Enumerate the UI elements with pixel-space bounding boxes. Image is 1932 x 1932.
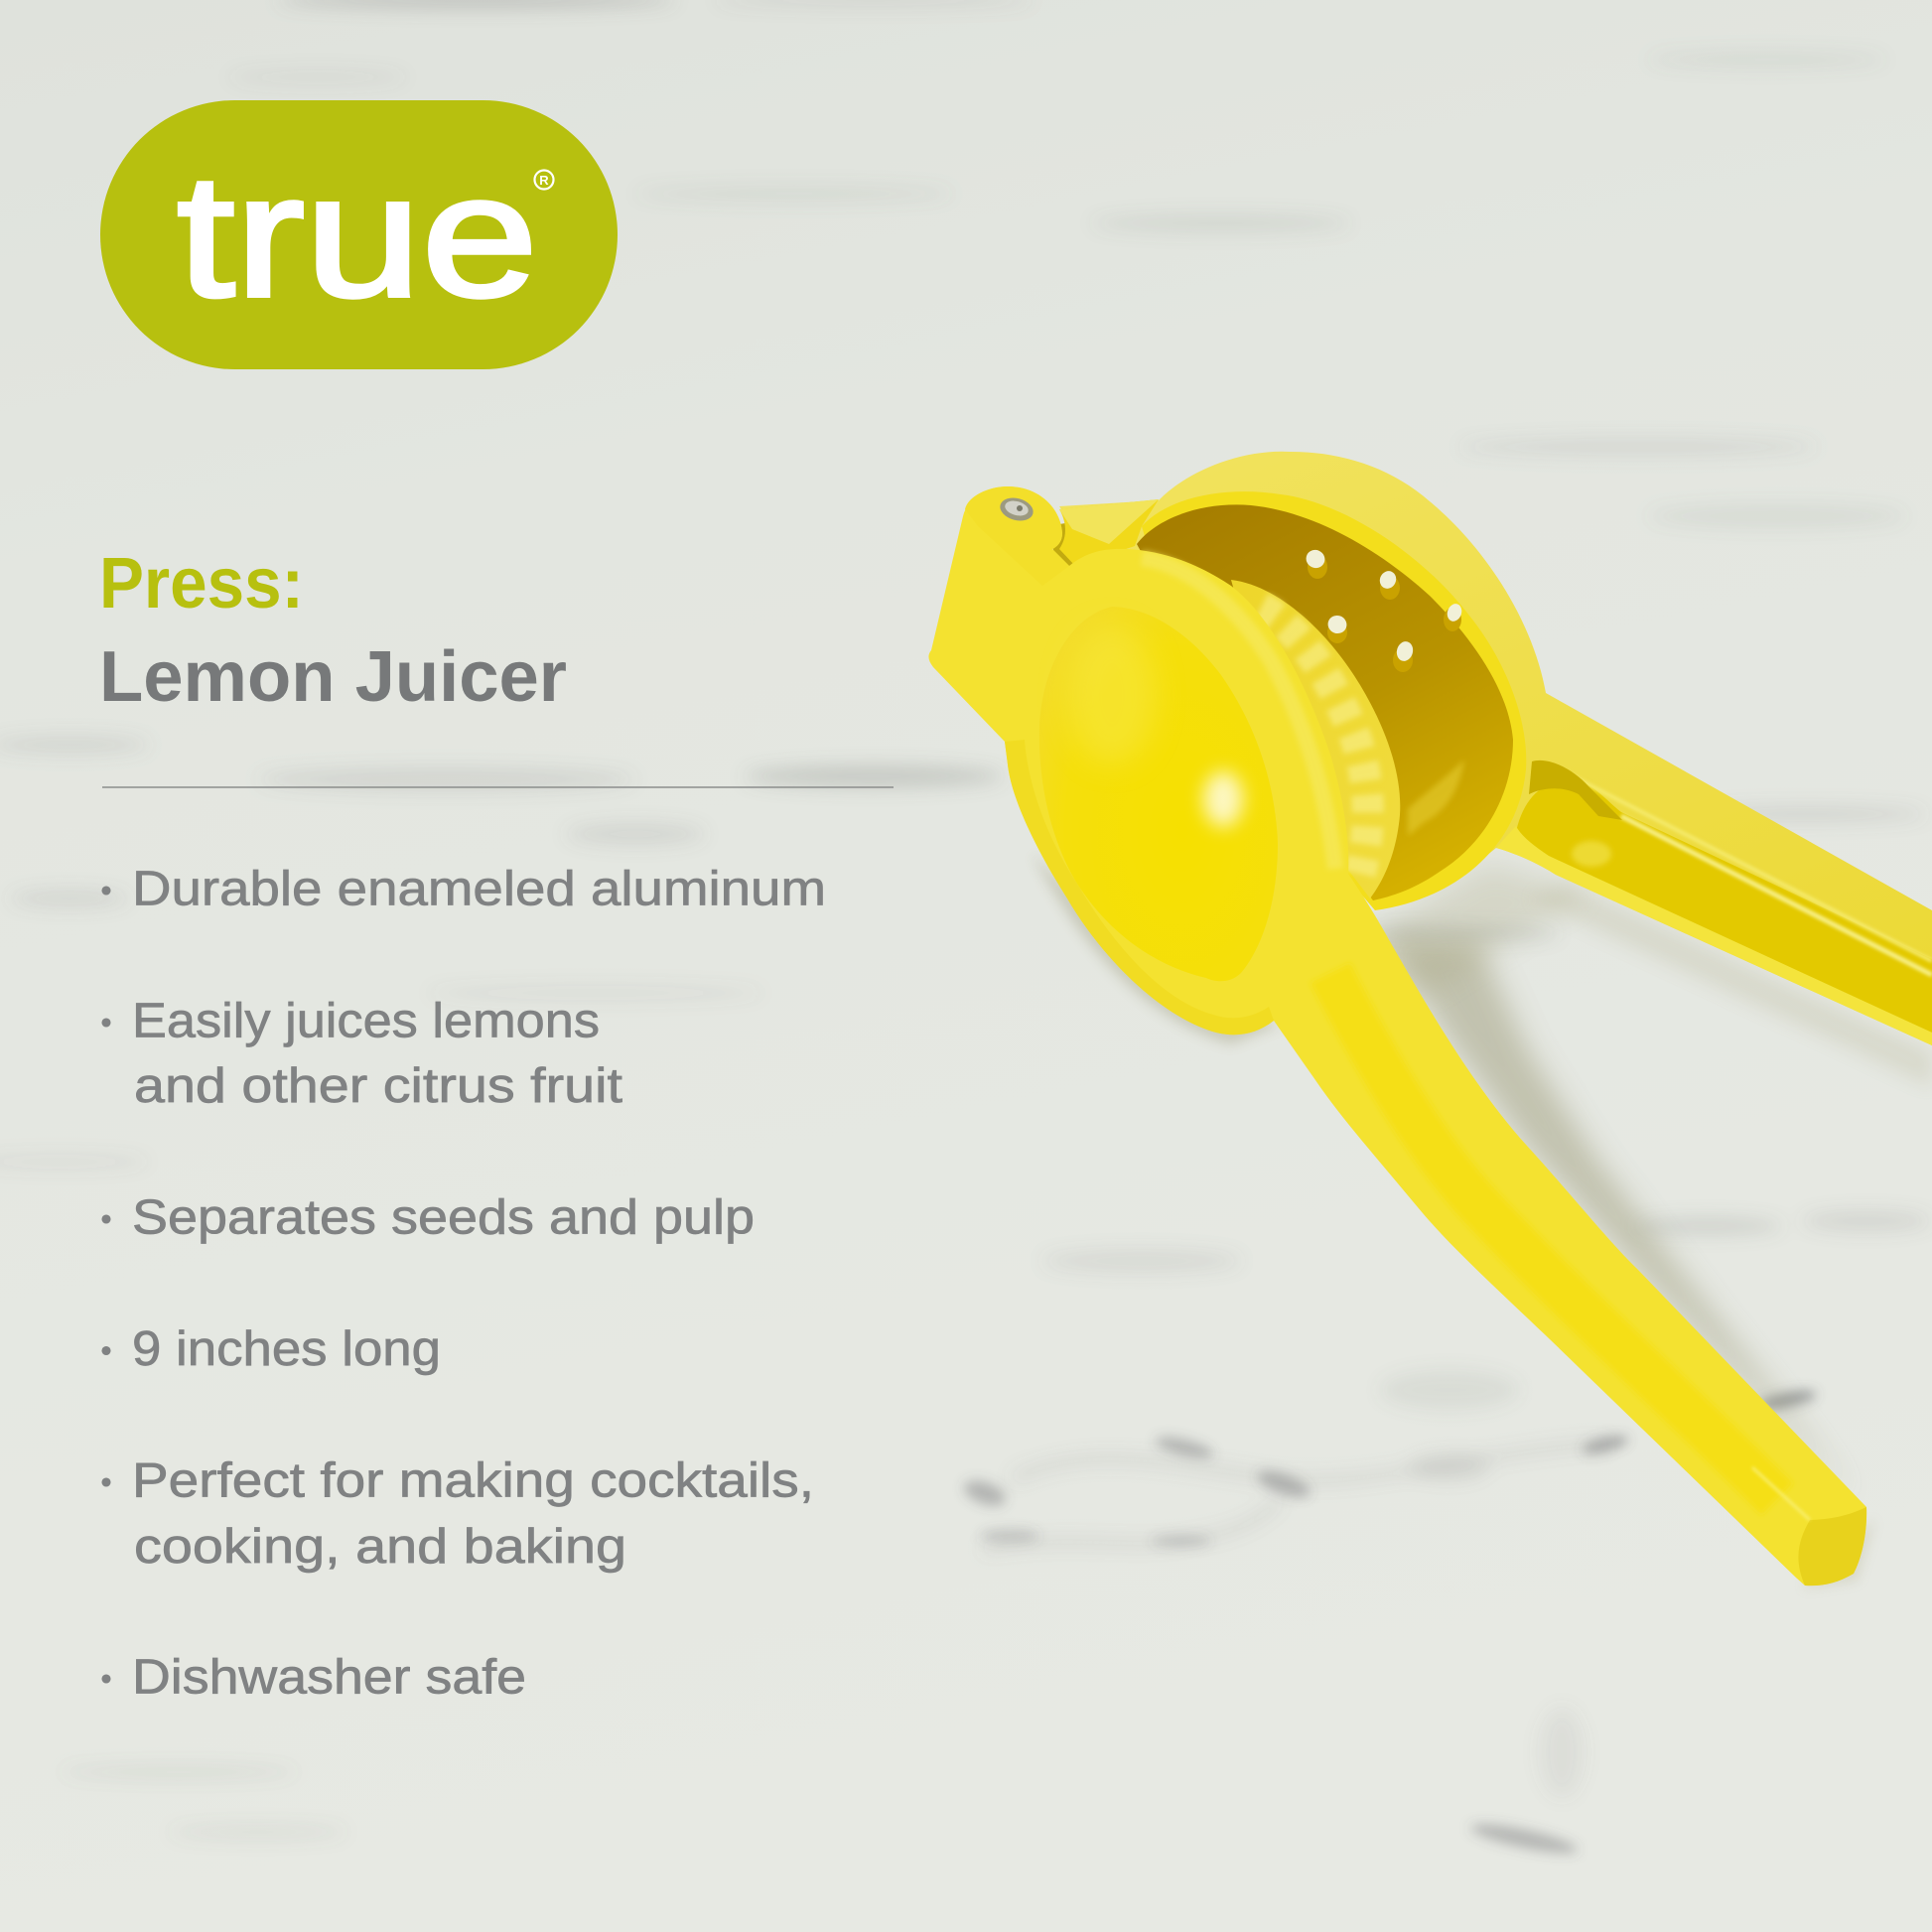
bullet: dishwasher: Dishwasher safe	[132, 1650, 526, 1704]
logo: true	[100, 100, 618, 369]
end cap highlight	[1752, 1467, 1810, 1520]
front cup outer body and handle	[928, 486, 1866, 1586]
logo wordmark: true	[177, 139, 538, 334]
heading: Lemon Juicer: Lemon Juicer	[99, 637, 567, 717]
bullet: uses	[102, 1453, 814, 1574]
hinge bracket	[1047, 499, 1159, 586]
heading	[99, 544, 567, 717]
ribbed reamer dome	[1231, 580, 1400, 898]
strainer holes	[1304, 547, 1464, 672]
lower lip	[1496, 826, 1932, 1045]
back cup dome	[1059, 452, 1932, 1045]
bullet: length: 9 inches long	[132, 1322, 441, 1376]
bullet: easily juices: and other citrus fruit	[134, 1059, 622, 1113]
handle ridge band	[1330, 973, 1777, 1499]
handle channel	[1516, 780, 1932, 1033]
rivet	[998, 494, 1035, 524]
bullet: durable: Durable enameled aluminum	[132, 862, 826, 915]
hinge recess	[1047, 521, 1092, 586]
cast shadows	[1033, 854, 1932, 1588]
bowl highlight	[1203, 771, 1243, 827]
strainer interior	[1137, 504, 1513, 900]
heading: Press: Press:	[99, 544, 304, 623]
registered mark	[534, 171, 554, 189]
handle end cap	[1798, 1507, 1866, 1586]
bullet: easily juices	[102, 995, 622, 1113]
logo pill	[100, 100, 618, 369]
handle highlights	[1621, 816, 1932, 975]
back cup rim	[1142, 491, 1526, 910]
rim highlight	[1142, 558, 1335, 869]
handle glint	[1572, 841, 1611, 867]
back handle body	[1496, 760, 1932, 1045]
joint recess	[1529, 760, 1622, 820]
bullet: easily juices: Easily juices lemons	[132, 995, 600, 1048]
bullet: separates: Separates seeds and pulp	[132, 1191, 755, 1245]
rim left shade	[1005, 740, 1274, 1035]
lemon juicer product	[928, 452, 1932, 1588]
reflection inside strainer	[1408, 759, 1464, 836]
inner bowl	[1039, 607, 1278, 981]
front press cup with long handle	[928, 486, 1866, 1586]
bullet: uses: Perfect for making cocktails,	[132, 1453, 814, 1507]
registered mark: R	[539, 173, 549, 188]
bowl top glow	[1067, 625, 1157, 764]
bullet: uses: cooking, and baking	[134, 1520, 626, 1574]
feature list	[102, 862, 826, 1704]
hinge arm	[965, 486, 1069, 586]
